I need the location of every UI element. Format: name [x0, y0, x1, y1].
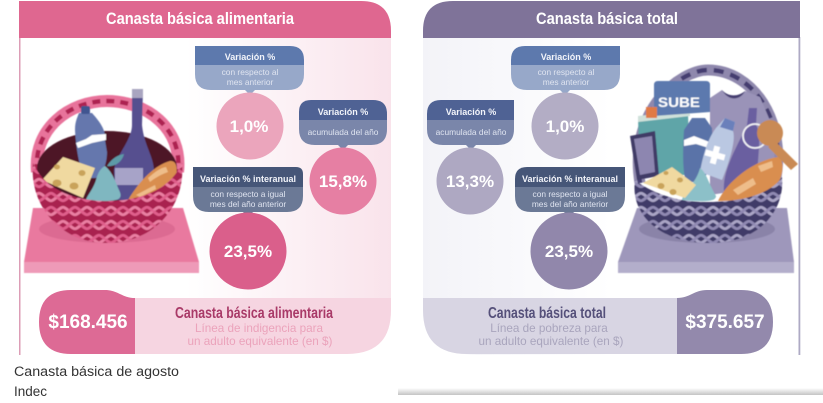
bubble: variación mensual: mes anterior — [543, 77, 589, 87]
bubble: variación mensual: con respecto al — [538, 67, 595, 77]
bubble: variación interanual: Variación % interanual — [522, 174, 618, 184]
panel: canasta básica total — [423, 1, 800, 355]
circle: 13,3%: 13,3% — [446, 172, 494, 191]
bottom bar: 375.657: Canasta básica total — [488, 305, 606, 322]
bottom bar: 168.456: Canasta básica alimentaria — [175, 305, 333, 322]
header: canasta básica alimentaria — [19, 1, 391, 38]
circle: 13,3% — [436, 148, 504, 214]
header: canasta básica total — [423, 1, 800, 38]
bubble: variación interanual — [193, 167, 303, 217]
circle: 1,0%: 1,0% — [546, 117, 584, 136]
bubble: variación mensual: Variación % — [541, 52, 591, 62]
header: canasta básica alimentaria: Canasta básica alimentaria — [106, 9, 294, 28]
bottom bar: 375.657 — [423, 290, 773, 354]
circle: 15,8% — [310, 148, 376, 214]
circle: 1,0% — [532, 92, 598, 160]
panel: canasta básica alimentaria — [19, 1, 391, 355]
circle: 23,5%: 23,5% — [224, 242, 272, 261]
caption: Canasta básica de agosto — [14, 364, 179, 379]
bubble: variación acumulada: acumulada del año — [436, 127, 507, 137]
bottom bar: 168.456: $168.456 — [48, 312, 128, 333]
bubble: variación mensual: Variación % — [225, 52, 275, 62]
bubble: variación interanual: mes del año anterior — [532, 199, 608, 209]
bubble: variación acumulada — [427, 100, 514, 150]
bottom bar: 375.657: $375.657 — [685, 312, 765, 333]
bubble: variación mensual — [195, 46, 304, 95]
illustration: total basket: SUBE — [658, 94, 700, 110]
bubble: variación acumulada: Variación % — [446, 107, 496, 117]
circle: 23,5% — [210, 212, 286, 290]
caption: Indec — [14, 384, 47, 399]
bubble: variación mensual — [511, 46, 620, 95]
bottom bar: 168.456: un adulto equivalente (en $) — [188, 335, 333, 348]
header: canasta básica total: Canasta básica total — [536, 9, 678, 28]
illustration: total basket — [618, 70, 798, 273]
bubble: variación mensual: con respecto al — [222, 67, 279, 77]
bubble: variación acumulada: acumulada del año — [308, 127, 379, 137]
bubble: variación interanual: con respecto a igual — [533, 189, 608, 199]
circle: 23,5% — [530, 212, 608, 290]
illustration: food basket — [24, 89, 199, 273]
bubble: variación interanual — [515, 167, 625, 217]
bottom bar: 168.456 — [39, 290, 391, 354]
circle: 1,0% — [216, 92, 284, 160]
bottom bar: 375.657: un adulto equivalente (en $) — [479, 335, 624, 348]
circle: 15,8%: 15,8% — [319, 172, 367, 191]
bubble: variación acumulada — [299, 100, 387, 150]
caption — [14, 364, 179, 399]
bubble: variación interanual: mes del año anterior — [210, 199, 286, 209]
bubble: variación mensual: mes anterior — [227, 77, 273, 87]
bubble: variación acumulada: Variación % — [318, 107, 368, 117]
circle: 1,0%: 1,0% — [230, 117, 268, 136]
bubble: variación interanual: con respecto a igual — [211, 189, 286, 199]
circle: 23,5%: 23,5% — [545, 242, 593, 261]
bubble: variación interanual: Variación % interanual — [200, 174, 296, 184]
bottom bar: 375.657: Línea de pobreza para — [490, 322, 608, 335]
bottom bar: 168.456: Línea de indigencia para — [195, 322, 324, 335]
